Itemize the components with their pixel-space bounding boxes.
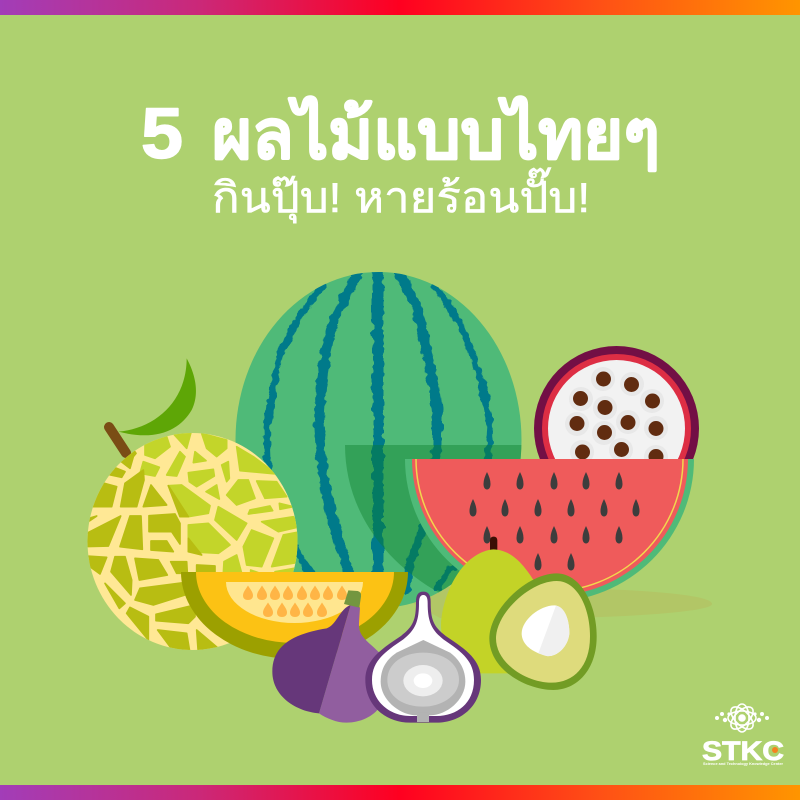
fig half inner flesh [387, 653, 459, 707]
logo orange dot [772, 747, 778, 753]
passion fruit [534, 346, 699, 459]
whole watermelon [236, 270, 530, 622]
logo dots [715, 712, 769, 722]
whole melon [83, 430, 303, 653]
ground shadow [407, 587, 712, 618]
melon light cells [140, 430, 303, 573]
fig light side [319, 605, 380, 723]
fig half center [414, 673, 432, 688]
passion fruit flesh [548, 360, 685, 459]
melon dark cells [83, 445, 218, 653]
fig dark side [272, 605, 351, 713]
melon body [88, 433, 298, 650]
melon stem [109, 427, 126, 453]
pear [441, 549, 543, 673]
fig whole [272, 590, 380, 723]
avocado skin [489, 573, 597, 690]
avocado flesh [496, 581, 590, 683]
fig half [365, 592, 481, 723]
slice flesh [412, 459, 688, 596]
STKC logo [702, 703, 784, 766]
fig half white [372, 595, 474, 716]
watermelon stripes [267, 270, 490, 590]
slice yellow line [416, 459, 683, 592]
fig half bottom stem [417, 713, 429, 722]
slice rind [405, 459, 694, 602]
fig half skin [365, 592, 481, 723]
watermelon body [236, 272, 522, 608]
slice seeds [470, 472, 640, 570]
top gradient bar [0, 0, 800, 15]
fig half core [403, 665, 443, 696]
melon slice seeds [243, 586, 347, 617]
subtitle: กินปุ๊บ! หายร้อนปั๊บ! [212, 167, 590, 224]
watermelon shadow [345, 445, 522, 592]
title: ผลไม้แบบไทยๆ [212, 95, 660, 173]
logo atom icon [727, 703, 757, 733]
passion fruit seeds [570, 372, 664, 464]
fig half outer flesh [381, 640, 465, 715]
watermelon slice [405, 459, 694, 602]
pear stem [490, 537, 497, 553]
melon slice flesh [196, 572, 394, 643]
fig stem [344, 590, 361, 608]
logo tagline: Science and Technology Knowledge Center [703, 761, 783, 766]
passion fruit rind [534, 346, 699, 459]
melon slice rind [181, 572, 408, 659]
melon leaf [118, 358, 196, 435]
passion fruit seeds halos [565, 367, 668, 469]
melon slice core [226, 582, 363, 623]
melon slice [181, 572, 408, 659]
title: 5 [141, 95, 183, 174]
bottom gradient bar [0, 785, 800, 800]
avocado pit shade [538, 606, 569, 656]
logo wordmark: STKC [702, 736, 784, 766]
melon cells [83, 430, 303, 653]
avocado pit [522, 605, 569, 656]
pear and avocado [441, 537, 597, 690]
